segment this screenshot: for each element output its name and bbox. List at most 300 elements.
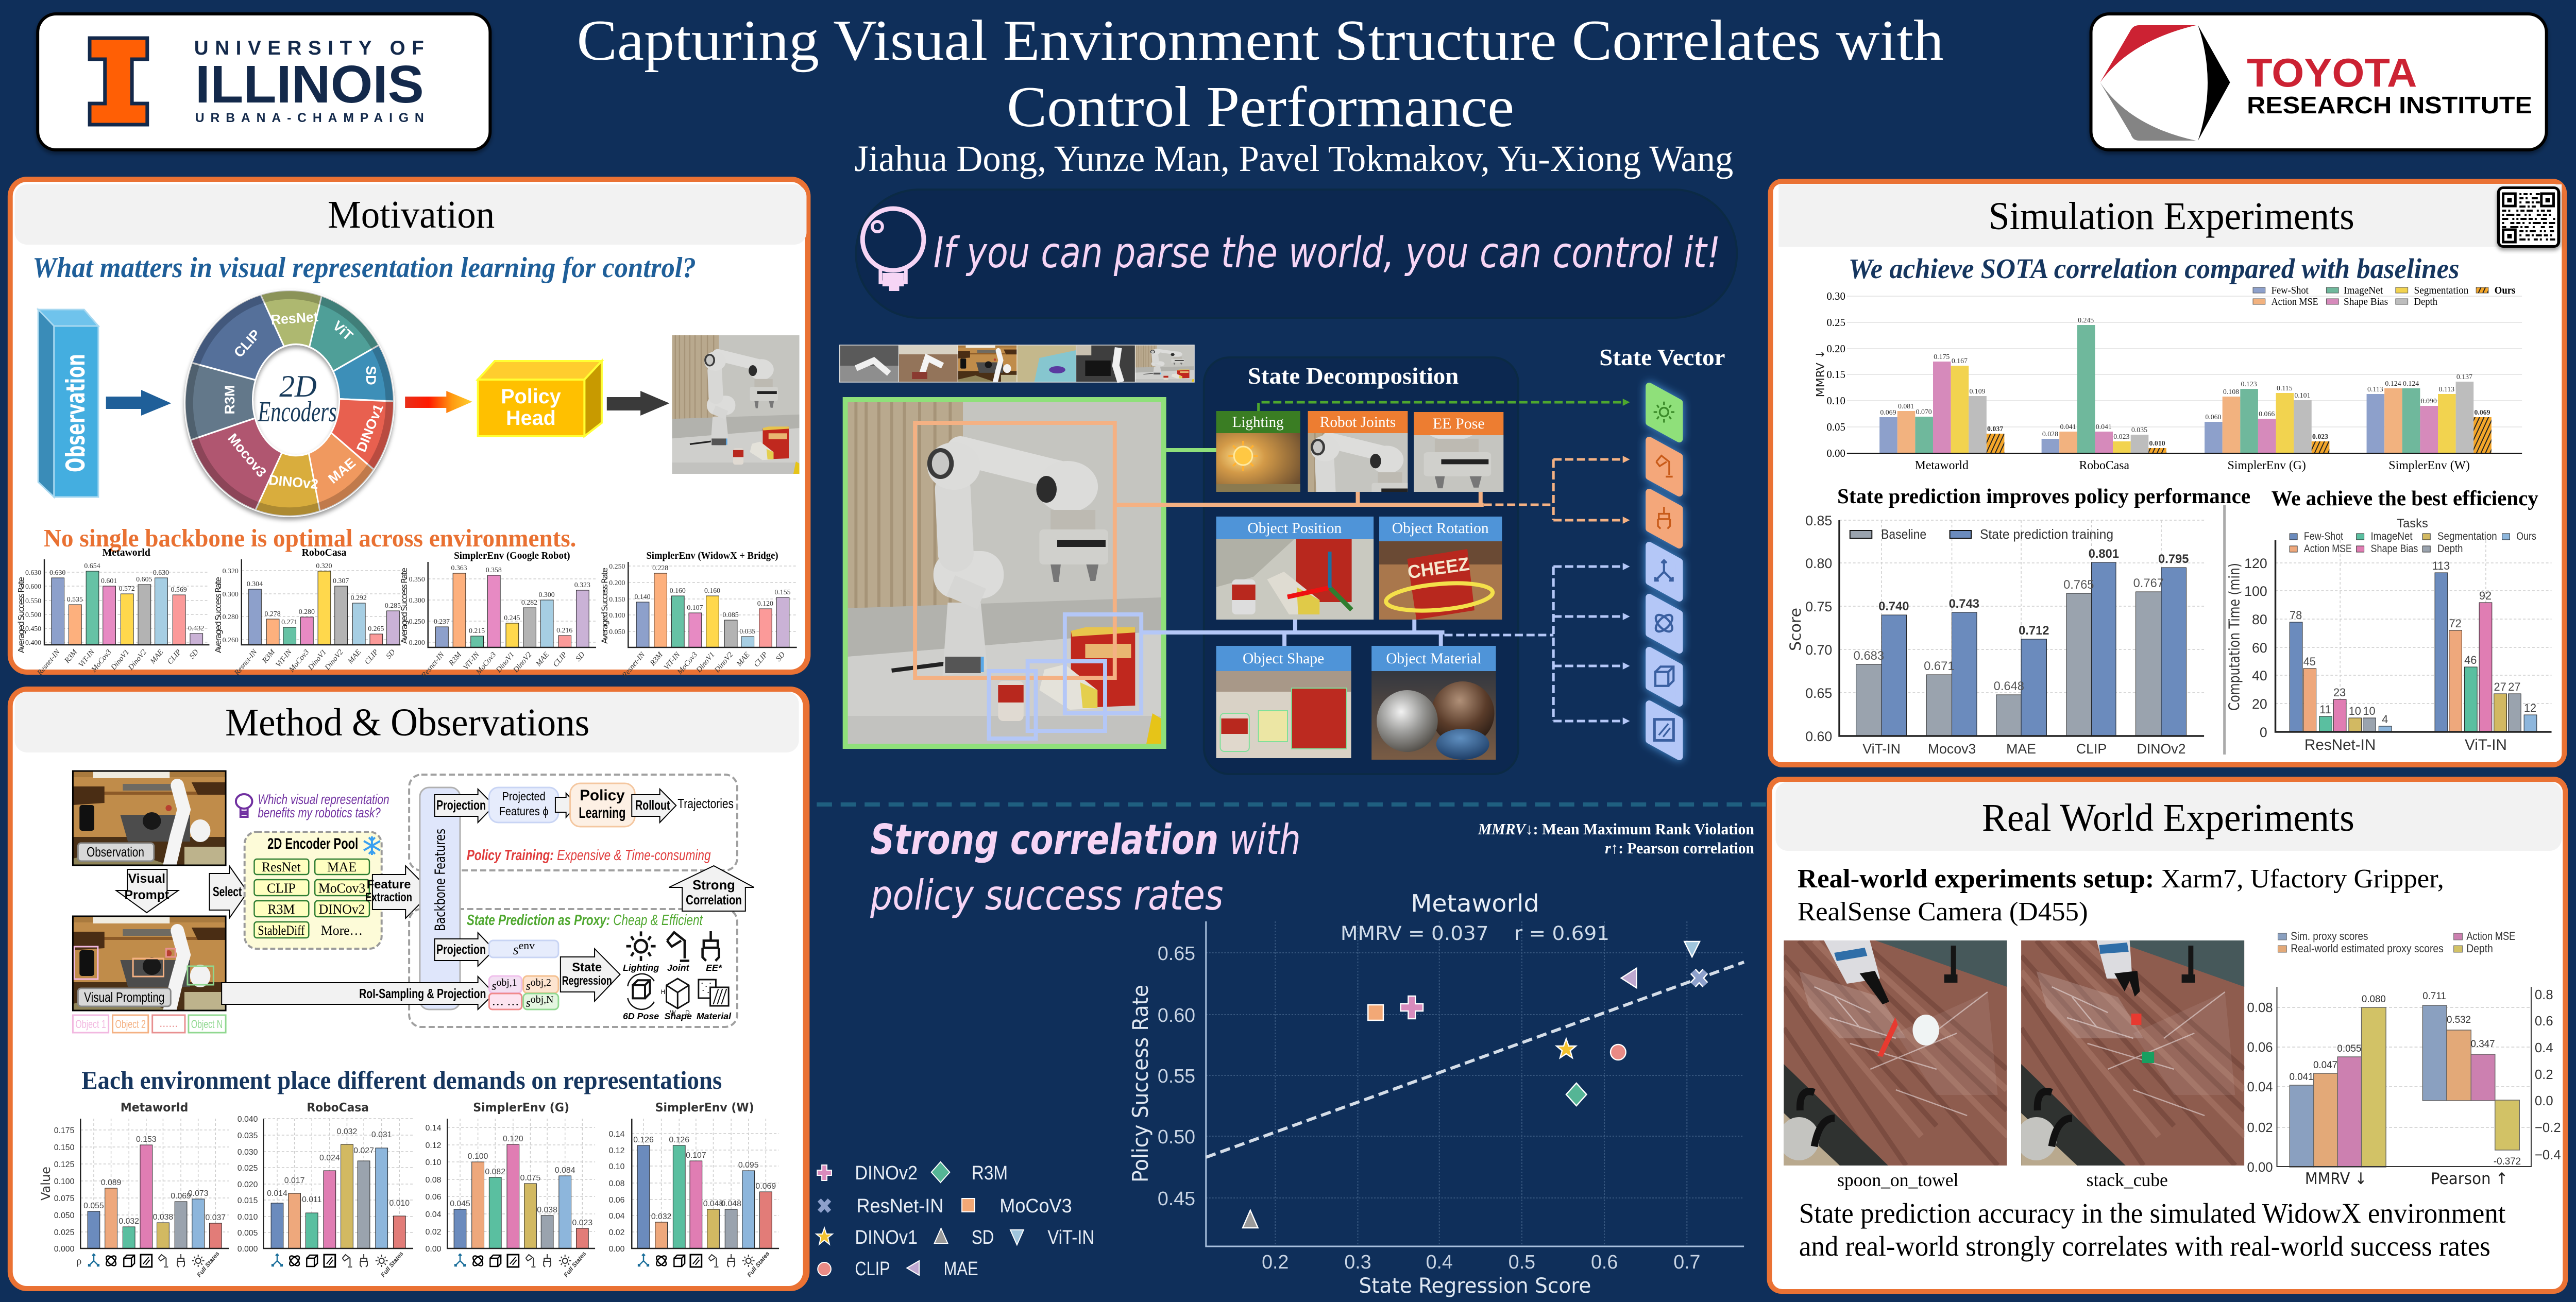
bar chart: metaworld demands: Value [39, 1167, 53, 1201]
bar chart: simplerenv widowx success: SimplerEnv (WidowX + Bridge) [646, 550, 778, 561]
bar chart: robocasa success: 0.304 [247, 580, 263, 588]
bar chart: simplerenv W demands: SimplerEnv (W) [655, 1101, 754, 1115]
scatter legend [816, 1162, 1094, 1280]
bar chart: simplerenv widowx success: R3M [648, 650, 665, 668]
tile: lighting [1216, 411, 1300, 492]
bar chart: MMRV comparison: 0.041 [2060, 423, 2076, 431]
chart legend: State prediction training [1980, 527, 2113, 542]
bar chart: MMRV comparison: 0.113 [2367, 386, 2383, 393]
arrow: to policy learning [555, 793, 577, 817]
bar chart: metaworld demands: 0.075 [54, 1194, 75, 1203]
bar chart: MMRV comparison: 0.041 [2096, 423, 2112, 431]
panel: motivation [8, 177, 810, 680]
bar chart: simplerenv google robot success: CLIP [552, 650, 569, 669]
bar chart: simplerenv google robot success: 0.216 [556, 627, 572, 635]
icons: state attributes: D [685, 1009, 690, 1016]
bar chart: MMRV and Pearson: -0.372 [2494, 1156, 2521, 1167]
chart: encoder wheel: R3M [222, 385, 238, 415]
box: s env [489, 939, 558, 958]
bar chart: policy performance: 0.795 [2158, 552, 2189, 566]
bar chart: simplerenv widowx success: 0.140 [634, 593, 651, 601]
bar chart: MMRV comparison: Metaworld [1915, 459, 1969, 472]
bar chart: simplerenv G demands: 0.14 [426, 1124, 442, 1133]
bar chart: computation time: 40 [2252, 668, 2267, 683]
bar chart: MMRV comparison: 0.25 [1827, 316, 1845, 329]
bar chart: metaworld demands: 0.073 [188, 1189, 209, 1198]
bar chart: simplerenv widowx success: MAE [735, 650, 752, 669]
photo: robot [672, 335, 800, 474]
heading: method and observations: Method & Observations [225, 701, 589, 744]
arrow: rollout: Rollout [635, 798, 670, 813]
bar chart: computation time: 100 [2244, 584, 2267, 599]
x axis label: State Regression Score [1359, 1274, 1591, 1298]
icons: state attributes: 6D Pose [623, 1011, 659, 1021]
image: observation: Observation [87, 845, 144, 860]
chart legend: ImageNet [2370, 530, 2413, 542]
bar chart: robocasa demands: 0.000 [238, 1245, 258, 1254]
chart legend: Few-Shot [2304, 530, 2343, 542]
bar chart: computation time: 72 [2449, 617, 2462, 630]
bar chart: MMRV comparison: 0.123 [2241, 381, 2257, 388]
bar chart: simplerenv G demands: 0.100 [468, 1152, 488, 1161]
logo: University of Illinois [38, 14, 490, 150]
bar chart: simplerenv widowx success: 0.250 [609, 563, 625, 571]
chart legend [1850, 527, 2113, 542]
bar chart: policy performance: CLIP [2076, 741, 2107, 757]
chart legend [2290, 517, 2536, 555]
bar chart: robocasa success: 0.271 [281, 619, 297, 626]
y axis: 0.45 [1158, 1188, 1195, 1210]
bar chart: computation time: 12 [2524, 701, 2536, 714]
chart: encoder wheel: Mocov3 [225, 431, 269, 480]
bar chart: policy performance: Score [1787, 608, 1805, 651]
wordmark [2247, 51, 2532, 118]
object state tokens: obj,1 [497, 977, 517, 988]
bar chart: simplerenv W demands: 0.126 [669, 1136, 689, 1144]
chart legend: Depth [2414, 296, 2437, 307]
bar chart: policy performance: 0.648 [1994, 679, 2024, 693]
subheading: environment demands: Each environment place different demands on representations [81, 1066, 722, 1094]
heading: strong correlation: Strong correlation with [870, 816, 1301, 864]
bar chart: MMRV comparison: 0.070 [1916, 408, 1932, 416]
scatter chart: metaworld: MMRV = 0.037 r = 0.691 [1341, 922, 1609, 945]
bar chart: simplerenv W demands: 0.095 [738, 1161, 759, 1170]
panel: policy training dashed box [409, 775, 737, 870]
arrow: projection bottom [435, 933, 494, 966]
bar chart: computation time: 46 [2464, 654, 2477, 666]
bar chart: simplerenv google robot success: SimplerEnv (Google Robot) [454, 550, 570, 561]
bar chart: metaworld demands: 0.175 [54, 1126, 75, 1135]
bar chart: policy performance: 0.743 [1949, 597, 1979, 611]
bar chart: robocasa success: 0.300 [223, 591, 239, 598]
bar chart: robocasa demands: 0.017 [284, 1176, 305, 1185]
bar chart: computation time: 60 [2252, 640, 2267, 656]
arrow: feature extraction [365, 866, 432, 918]
bar chart: policy performance: 0.80 [1805, 556, 1832, 571]
bar chart: simplerenv G demands: 0.10 [426, 1158, 442, 1167]
arrow: state regression [561, 949, 620, 1001]
bar chart: simplerenv G demands: SimplerEnv (G) [473, 1101, 569, 1115]
bar chart: simplerenv widowx success: CLIP [753, 650, 769, 669]
bar chart: simplerenv google robot success: SD [574, 650, 586, 663]
object state tokens: s [526, 980, 531, 993]
bar chart: simplerenv W demands: Full States [745, 1250, 771, 1278]
bar chart: robocasa demands: Full States [379, 1250, 405, 1278]
bar chart: MMRV and Pearson: 0.532 [2447, 1015, 2471, 1025]
heading: state decomposition: State Decomposition [1248, 363, 1459, 389]
object state tokens: obj,N [531, 994, 553, 1005]
bar chart: MMRV and Pearson: 0.00 [2247, 1160, 2273, 1175]
scatter legend: ViT-IN [1047, 1227, 1094, 1248]
bar chart: MMRV and Pearson: 0.2 [2535, 1068, 2553, 1082]
image: observation [73, 771, 226, 865]
bar chart: simplerenv W demands: 0.04 [609, 1212, 625, 1221]
bar chart: simplerenv W demands: 0.06 [609, 1196, 625, 1205]
bar chart: robocasa demands: 0.015 [238, 1196, 258, 1205]
bar chart: MMRV comparison: 0.175 [1934, 353, 1950, 361]
scatter legend: CLIP [855, 1258, 890, 1280]
bar chart: robocasa demands: 0.040 [238, 1115, 258, 1124]
bar chart: policy performance: 0.70 [1805, 642, 1832, 658]
bar chart: computation time: 10 [2349, 705, 2361, 717]
bar chart: metaworld success: 0.630 [49, 569, 65, 577]
arrow: projection top [435, 789, 494, 823]
bar chart: robocasa success: ViT-IN [274, 647, 294, 669]
chart legend: Segmentation [2414, 285, 2468, 296]
x axis: 0.7 [1673, 1252, 1700, 1273]
bar chart: simplerenv widowx success [600, 550, 797, 680]
bar chart: metaworld success: Averaged Success Rate [16, 577, 26, 653]
chart: encoder wheel: DINOv2 [268, 472, 319, 492]
bar chart: metaworld success: CLIP [166, 648, 183, 666]
bar chart: MMRV comparison: 0.101 [2294, 392, 2311, 400]
bar chart: simplerenv widowx success: 0.155 [774, 589, 791, 596]
arrow: observation to encoders [106, 390, 171, 416]
bar chart: simplerenv google robot success: 0.300 [539, 591, 555, 599]
heading: real world experiments: Real World Experiments [1982, 797, 2354, 840]
subheading: SOTA correlation: We achieve SOTA correlation compared with baselines [1849, 253, 2460, 284]
arrow: state regression: Regression [562, 974, 612, 988]
title: Capturing Visual Environment Structure Correlates with [577, 9, 1944, 73]
y axis [1158, 943, 1195, 1210]
bar chart: simplerenv G demands: 0.06 [426, 1193, 442, 1202]
bar chart: metaworld success: 0.630 [153, 569, 169, 577]
tile: object position [1216, 517, 1374, 620]
bar chart: metaworld success: 0.601 [101, 577, 117, 585]
chart legend: Segmentation [2437, 530, 2497, 542]
bar chart: MMRV comparison: 0.090 [2421, 398, 2437, 405]
bar chart: simplerenv widowx success: DinoV1 [694, 650, 717, 675]
bar chart: computation time: 92 [2479, 589, 2492, 602]
bar chart: metaworld success: 0.500 [25, 611, 41, 619]
bar chart: simplerenv G demands: 0.02 [426, 1228, 442, 1237]
panel: 2D encoder pool [245, 832, 382, 949]
authors: Jiahua Dong, Yunze Man, Pavel Tokmakov, Yu-Xiong Wang [854, 139, 1733, 179]
scatter legend: ResNet-IN [856, 1195, 943, 1217]
bar chart: metaworld demands: Full States [195, 1250, 221, 1278]
bar chart: metaworld demands: 0.069 [171, 1192, 191, 1201]
image strip: environments [840, 345, 1194, 382]
bar chart: robocasa demands: 0.011 [302, 1195, 322, 1204]
bar chart: MMRV comparison: 0.113 [2439, 386, 2454, 393]
bar chart: metaworld success [16, 547, 209, 677]
box: policy learning: Learning [579, 804, 625, 821]
bar chart: policy performance: 0.65 [1805, 686, 1832, 701]
text: setup: Real-world experiments setup: Xarm7, Ufactory Gripper, [1798, 864, 2444, 894]
bar chart: simplerenv google robot success: 0.300 [409, 597, 425, 605]
bar chart: robocasa demands: 0.035 [238, 1132, 258, 1140]
bar chart: simplerenv W demands: 0.02 [609, 1228, 625, 1237]
chart legend: Sim. proxy scores [2291, 930, 2368, 943]
bar chart: simplerenv google robot success: 0.200 [409, 639, 425, 647]
bar chart: robocasa demands: 0.032 [337, 1127, 357, 1136]
bar chart: MMRV comparison: 0.30 [1827, 290, 1845, 302]
tile: object shape [1216, 646, 1351, 758]
object state tokens: s [492, 980, 497, 993]
bar chart: policy performance [1787, 513, 2204, 757]
encoder label: 2D [279, 369, 317, 403]
chart legend: Shape Bias [2344, 296, 2388, 307]
bar chart: MMRV and Pearson: Pearson ↑ [2431, 1170, 2508, 1188]
bar chart: robocasa success: R3M [261, 647, 277, 665]
bar chart: MMRV and Pearson [2247, 930, 2561, 1188]
bar: backbone features [420, 787, 460, 1009]
bar chart: policy performance: 0.683 [1854, 649, 1884, 663]
text: conclusion: and real-world strongly correlates with real-world success rates [1799, 1230, 2490, 1262]
chart legend: Baseline [1881, 527, 1926, 542]
text: setup: RealSense Camera (D455) [1798, 897, 2088, 927]
tile: object rotation: Object Rotation [1392, 520, 1489, 537]
panel: 2D encoder pool: MoCov3 [318, 881, 365, 896]
scatter legend: DINOv2 [855, 1162, 918, 1184]
arrow: visual prompt [116, 869, 178, 913]
bar chart: robocasa success: 0.285 [385, 602, 401, 610]
subheading: no single backbone: No single backbone is optimal across environments. [44, 524, 576, 552]
label: state prediction as proxy: State Prediction as Proxy: Cheap & Efficient [467, 912, 703, 929]
chart legend: Ours [2516, 530, 2536, 542]
arrow: state regression: State [572, 961, 602, 974]
bar chart: MMRV and Pearson: MMRV ↓ [2305, 1170, 2367, 1188]
bar chart: MMRV comparison: 0.035 [2131, 426, 2147, 434]
arrow: feature extraction: Feature [367, 878, 411, 892]
bar chart: metaworld demands: Metaworld [121, 1101, 188, 1115]
block: observation [38, 310, 98, 497]
panel: simulation experiments [1768, 179, 2567, 767]
bar chart: simplerenv google robot success: 0.363 [451, 564, 467, 572]
panel: real world experiments [1767, 777, 2568, 1294]
box: s env: s [513, 942, 519, 958]
bar chart: metaworld success: ViT-IN [77, 647, 97, 669]
bar chart: simplerenv G demands [426, 1101, 595, 1278]
wordmark: ILLINOIS [195, 54, 424, 114]
arrow: RoI sampling and projection: RoI-Sampling & Projection [359, 987, 486, 1001]
bar chart: policy performance: 0.75 [1805, 599, 1832, 614]
bar chart: metaworld success: Resnet-IN [36, 647, 62, 677]
bar chart: MMRV and Pearson: 0.08 [2247, 1001, 2273, 1015]
bar chart: MMRV comparison: 0.069 [2474, 409, 2490, 417]
bar chart: metaworld success: DinoV2 [126, 648, 148, 672]
x axis: 0.4 [1426, 1252, 1453, 1273]
bar chart: computation time: 78 [2290, 609, 2302, 622]
x axis [1262, 1252, 1700, 1273]
arrow: policy head to robot [607, 391, 669, 416]
bar chart: robocasa demands: 0.031 [371, 1130, 392, 1139]
bar chart: simplerenv google robot success [399, 550, 596, 680]
bar chart: simplerenv G demands: Full States [562, 1250, 588, 1278]
icons: state attributes: EE* [706, 963, 722, 973]
x axis: 0.3 [1344, 1252, 1371, 1273]
block: policy head: Policy [501, 385, 561, 408]
panel: 2D encoder pool: More… [321, 923, 363, 938]
bar chart: MMRV comparison: 0.15 [1827, 368, 1845, 381]
tagline text: If you can parse the world, you can control it! [934, 229, 1721, 278]
chart legend [2253, 285, 2516, 307]
chart: encoder wheel: ResNet [270, 309, 319, 328]
bar chart: robocasa demands: RoboCasa [307, 1101, 369, 1115]
box: policy learning [570, 783, 635, 827]
icons: state attributes: Joint [667, 963, 690, 973]
bar chart: metaworld success: 0.400 [25, 639, 41, 647]
icon: purple bulb [236, 794, 252, 817]
arrow: feature extraction: Extraction [365, 890, 412, 904]
bar chart: policy performance: 0.712 [2019, 624, 2049, 638]
bar chart: robocasa success: MoCov3 [287, 648, 311, 674]
scatter legend: R3M [972, 1162, 1008, 1184]
bar chart: computation time: 45 [2303, 655, 2316, 668]
wordmark: UNIVERSITY OF [194, 37, 424, 59]
chart legend: Depth [2437, 543, 2463, 555]
heading: strong correlation [870, 816, 1301, 919]
bar chart: MMRV comparison: 0.167 [1952, 357, 1968, 365]
bar chart: simplerenv google robot success: 0.282 [521, 599, 537, 607]
bar chart: metaworld success: 0.535 [67, 596, 83, 604]
bar chart: simplerenv google robot success: R3M [447, 650, 464, 668]
panel: 2D encoder pool: MAE [327, 860, 357, 875]
bar chart: simplerenv google robot success: Resnet-IN [419, 650, 446, 680]
callout: which visual representation: benefits my robotics task? [258, 805, 381, 820]
bar chart: metaworld demands: 0.032 [118, 1217, 139, 1226]
bar chart: computation time: ViT-IN [2465, 736, 2507, 753]
callout: tagline pill [856, 190, 1737, 318]
bar chart: metaworld success: 0.432 [188, 625, 204, 632]
bar chart: MMRV comparison: 0.245 [2078, 317, 2094, 324]
metric definitions [1478, 820, 1754, 857]
bar chart: simplerenv widowx success: Resnet-IN [620, 650, 647, 680]
photo: robot scene with boxes [845, 400, 1164, 746]
bar chart: simplerenv G demands: 0.075 [520, 1174, 540, 1183]
bar chart: robocasa success: 0.260 [223, 637, 239, 644]
bar chart: robocasa success: RoboCasa [302, 547, 346, 558]
bar chart: MMRV and Pearson: 0.080 [2362, 994, 2386, 1005]
bar chart: policy performance: 0.85 [1805, 513, 1832, 528]
tile: object material [1371, 646, 1496, 760]
bar chart: robocasa success: 0.265 [368, 625, 384, 633]
arrow: RoI sampling and projection [222, 976, 494, 1009]
bar chart: simplerenv widowx success: 0.050 [609, 628, 625, 636]
bar chart: simplerenv W demands: 0.08 [609, 1179, 625, 1188]
label: spoon_on_towel: spoon_on_towel [1837, 1170, 1958, 1190]
bar chart: metaworld success: 0.630 [25, 569, 41, 577]
block: observation: Observation [61, 354, 91, 472]
bar chart: metaworld demands: 0.050 [54, 1211, 75, 1220]
bar chart: simplerenv widowx success: 0.160 [704, 587, 720, 595]
bar chart: simplerenv widowx success: SD [774, 650, 787, 663]
scatter chart: metaworld [1128, 890, 1744, 1298]
bar chart: policy performance: 0.60 [1805, 729, 1832, 744]
heading: strong correlation: policy success rates [870, 871, 1223, 919]
bar chart: MMRV comparison [1814, 285, 2522, 472]
bar chart: simplerenv W demands: 0.048 [703, 1200, 723, 1208]
bar chart: simplerenv G demands: 0.023 [572, 1219, 592, 1227]
subheading: state prediction improves: State prediction improves policy performance [1837, 485, 2250, 508]
block: policy head [478, 361, 602, 436]
bar chart: MMRV comparison: SimplerEnv (G) [2228, 459, 2306, 472]
bar chart: robocasa success: 0.280 [223, 613, 239, 621]
chart: encoder wheel: Encoders [258, 396, 337, 428]
panel: 2D encoder pool: CLIP [267, 881, 296, 896]
arrow: projection top: Projection [436, 798, 486, 813]
bar chart: MMRV and Pearson: 0.347 [2471, 1039, 2495, 1050]
bar chart: simplerenv widowx success: MoCov3 [675, 650, 699, 677]
bar chart: robocasa success: Resnet-IN [233, 647, 259, 677]
bar chart: metaworld demands: 0.125 [54, 1160, 75, 1169]
bar chart: robocasa demands [238, 1101, 413, 1278]
chart: encoder wheel: MAE [325, 455, 359, 487]
bar chart: computation time [2225, 517, 2552, 753]
icons: state attributes: H [661, 988, 665, 996]
panel: 2D encoder pool: DINOv2 [319, 902, 365, 917]
chart legend: ImageNet [2344, 285, 2383, 296]
bar chart: robocasa success: Averaged Success Rate [213, 577, 223, 653]
bar chart: metaworld demands: 0.055 [83, 1202, 104, 1210]
box: s env: env [519, 939, 535, 952]
object state tokens: s [526, 997, 531, 1010]
bar chart: metaworld success: 0.550 [25, 597, 41, 605]
bar chart: simplerenv W demands: 0.107 [686, 1151, 706, 1160]
tile: object material: Object Material [1386, 650, 1481, 667]
bar chart: MMRV comparison: 0.028 [2042, 431, 2058, 438]
bar chart: robocasa demands: 0.025 [238, 1164, 258, 1173]
photo: stack cube [2016, 940, 2245, 1166]
legend: prompted objects: Object 2 [115, 1018, 146, 1031]
bar chart: metaworld success: Metaworld [103, 547, 150, 558]
bar chart: robocasa demands: 0.014 [267, 1189, 287, 1198]
object state tokens: … … [492, 995, 519, 1008]
bar chart: simplerenv widowx success: 0.120 [757, 600, 773, 608]
object state tokens [489, 976, 558, 1010]
chart legend: Ours [2495, 285, 2516, 296]
bar chart: MMRV comparison: 0.108 [2223, 388, 2239, 396]
bar chart: simplerenv widowx success: 0.150 [609, 596, 625, 604]
chart: encoder wheel: ViT [330, 318, 356, 344]
bar chart: simplerenv G demands: 0.08 [426, 1176, 442, 1185]
icon: snowflake [364, 836, 380, 855]
tile: object position: Object Position [1247, 520, 1342, 537]
bar chart: metaworld success: 0.450 [25, 625, 41, 633]
logo: Toyota Research Institute [2091, 14, 2547, 150]
bar chart: computation time: 10 [2363, 705, 2376, 717]
subheading: question: What matters in visual representation learning for control? [32, 252, 696, 284]
QR code [2497, 186, 2560, 248]
metric definitions: MMRV↓: Mean Maximum Rank Violation [1478, 820, 1754, 838]
wordmark: RESEARCH INSTITUTE [2247, 92, 2532, 118]
bar chart: metaworld success: SD [188, 648, 200, 661]
chart legend: Shape Bias [2370, 543, 2418, 555]
title [577, 9, 1944, 139]
y axis: 0.55 [1158, 1066, 1195, 1087]
bar chart: simplerenv google robot success: Averaged Success Rate [399, 568, 409, 644]
bar chart: robocasa success: 0.278 [265, 610, 281, 618]
